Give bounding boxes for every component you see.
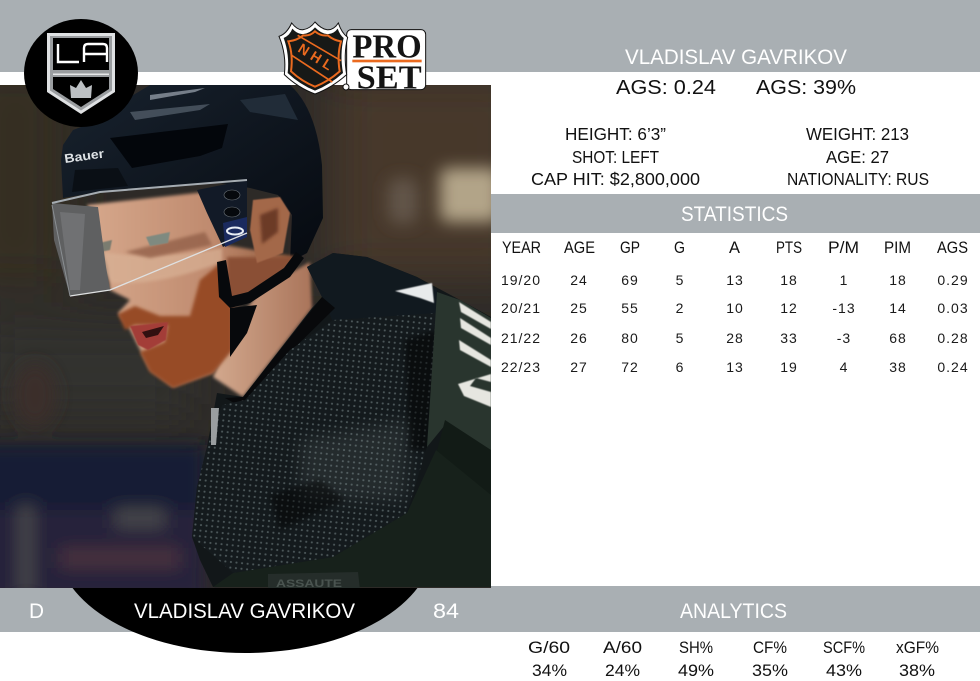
icon: jersey [180, 253, 491, 590]
player bio: NATIONALITY: RUS [787, 169, 929, 189]
icon: helmet [61, 85, 323, 262]
icon: NHL Pro Set logo: NHL [295, 40, 336, 74]
table header: P/M [828, 238, 859, 257]
table row 19/20: 5 [676, 272, 684, 288]
table row 21/22: 28 [726, 330, 744, 346]
icon: neck and face [87, 192, 312, 397]
player bio: AGE: 27 [826, 147, 889, 167]
table row 20/21: 0.03 [937, 300, 969, 316]
analytics table: 35% [752, 661, 788, 680]
table header: PIM [884, 238, 911, 257]
analytics table: 43% [826, 661, 862, 680]
table row 19/20: 1 [840, 272, 848, 288]
player bio: SHOT: LEFT [572, 147, 659, 167]
table row 20/21: 25 [570, 300, 588, 316]
table row 19/20: 24 [570, 272, 588, 288]
icon: jersey: ASSAUTE [276, 578, 342, 590]
analytics table: 34% [532, 661, 567, 680]
table row 20/21: 10 [726, 300, 744, 316]
table row 21/22: 68 [889, 330, 907, 346]
black name plate [72, 588, 418, 653]
table row 22/23: 6 [676, 359, 684, 375]
table row 20/21: 20/21 [501, 300, 541, 316]
black name plate: VLADISLAV GAVRIKOV [134, 600, 355, 623]
icon: NHL Pro Set logo: SET [357, 60, 422, 97]
table header: AGE [564, 238, 595, 257]
player name header: VLADISLAV GAVRIKOV [625, 46, 847, 69]
table row 19/20: 13 [726, 272, 744, 288]
icon: NHL Pro Set logo: PRO [352, 28, 422, 65]
table row 21/22 [501, 330, 969, 346]
icon: NHL Pro Set logo [279, 22, 426, 97]
table row 22/23: 19 [780, 359, 798, 375]
table row 21/22: 21/22 [501, 330, 541, 346]
overall AGS ratings: AGS: 0.24 [616, 76, 716, 99]
analytics table: SH% [679, 638, 713, 657]
table row 21/22: -3 [837, 330, 851, 346]
table row 20/21: -13 [832, 300, 856, 316]
table row 22/23: 13 [726, 359, 744, 375]
statistics band [491, 194, 980, 233]
player bio [531, 124, 929, 189]
icon: helmet: Bauer [63, 147, 105, 166]
table header: YEAR [502, 238, 541, 257]
table header: A [729, 238, 741, 257]
jersey number: 84 [433, 600, 459, 623]
analytics table: 38% [899, 661, 935, 680]
analytics table [528, 638, 939, 680]
player bio: WEIGHT: 213 [806, 124, 909, 144]
bottom grey band [0, 586, 980, 632]
table row 22/23: 4 [840, 359, 848, 375]
overall AGS ratings: AGS: 39% [756, 76, 856, 99]
player bio: HEIGHT: 6’3” [565, 124, 666, 144]
table row 19/20: 18 [780, 272, 798, 288]
icon: chin strap [217, 252, 304, 357]
table row 21/22: 80 [621, 330, 639, 346]
table header: PTS [776, 238, 802, 257]
table row 21/22: 5 [676, 330, 684, 346]
table header: G [674, 238, 685, 257]
table row 20/21: 2 [676, 300, 684, 316]
table row 19/20: 19/20 [501, 272, 541, 288]
table row 19/20: 18 [889, 272, 907, 288]
top grey band [0, 0, 980, 72]
position label: D [29, 600, 44, 623]
table row 20/21: 12 [780, 300, 798, 316]
table row 22/23: 22/23 [501, 359, 541, 375]
table row 20/21: 55 [621, 300, 639, 316]
table row 21/22: 0.28 [937, 330, 969, 346]
table row 19/20: 0.29 [937, 272, 969, 288]
statistics table [501, 238, 969, 375]
analytics table: CF% [753, 638, 787, 657]
analytics table: xGF% [896, 638, 939, 657]
table row 20/21: 14 [889, 300, 907, 316]
table row 22/23: 0.24 [937, 359, 969, 375]
table row 22/23: 27 [570, 359, 588, 375]
player bio: CAP HIT: $2,800,000 [531, 169, 700, 189]
icon: visor [52, 180, 247, 296]
table row 19/20: 69 [621, 272, 639, 288]
table row 21/22: 33 [780, 330, 798, 346]
table row 22/23: 72 [621, 359, 639, 375]
table row 20/21 [501, 300, 969, 316]
analytics table: G/60 [528, 638, 570, 657]
analytics table: A/60 [603, 638, 642, 657]
table row 21/22: 26 [570, 330, 588, 346]
analytics table: 49% [678, 661, 714, 680]
table row 22/23: 38 [889, 359, 907, 375]
analytics heading: ANALYTICS [680, 600, 787, 623]
table header [502, 238, 968, 257]
table row 22/23 [501, 359, 969, 375]
statistics band: STATISTICS [681, 203, 788, 226]
table header: GP [620, 238, 640, 257]
analytics table: 24% [605, 661, 640, 680]
panel: right white area edge cover [491, 72, 980, 194]
analytics table: SCF% [823, 638, 865, 657]
photo: player portrait [0, 85, 491, 588]
overall AGS ratings [616, 76, 856, 99]
table header: AGS [937, 238, 968, 257]
table row 19/20 [501, 272, 969, 288]
icon: LA Kings team logo [24, 19, 138, 127]
